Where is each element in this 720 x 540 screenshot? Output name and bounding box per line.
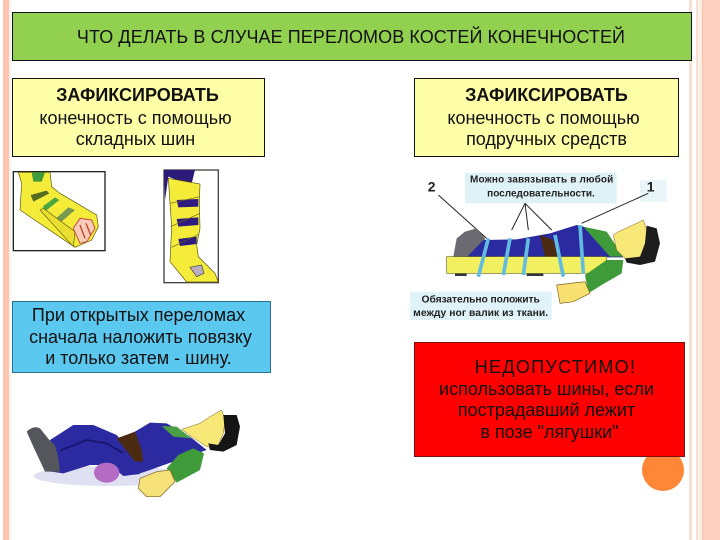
callout: not allowed: в позе "лягушки" bbox=[480, 422, 619, 442]
illustration: immobilising with improvised means: последовательности. bbox=[487, 189, 595, 200]
torso bbox=[133, 423, 207, 473]
panel: fix with folding splints: ЗАФИКСИРОВАТЬ bbox=[56, 85, 219, 105]
hand bbox=[138, 470, 175, 497]
belt bbox=[117, 432, 143, 462]
callout: open fractures note: и только затем - шину. bbox=[45, 348, 232, 368]
callout: open fractures note bbox=[12, 301, 271, 373]
callout: not allowed: использовать шины, если bbox=[439, 379, 654, 399]
callout: not allowed: пострадавший лежит bbox=[458, 400, 635, 420]
title bbox=[12, 12, 692, 61]
caption: roller between legs bbox=[410, 292, 552, 320]
panel: fix with folding splints: конечность с помощью bbox=[39, 108, 232, 128]
collar and sleeve bbox=[162, 426, 192, 438]
illustration: immobilising with improvised means bbox=[410, 172, 666, 320]
caption: any order bbox=[465, 173, 617, 203]
roll of fabric bbox=[94, 463, 119, 483]
panel: fix with folding splints: складных шин bbox=[76, 129, 195, 149]
pointers bbox=[438, 193, 648, 238]
hand bbox=[557, 282, 590, 303]
body bbox=[467, 225, 623, 257]
illustration: splinted foot, side view bbox=[12, 171, 106, 252]
panel: fix with improvised means: подручных средств bbox=[466, 129, 627, 149]
panel: fix with improvised means: конечность с помощью bbox=[447, 108, 640, 128]
panel: fix with improvised means: ЗАФИКСИРОВАТЬ bbox=[465, 85, 628, 105]
ties bbox=[478, 225, 583, 277]
splint board bbox=[447, 257, 607, 273]
callout: not allowed bbox=[414, 342, 685, 457]
sleeve bbox=[585, 260, 623, 293]
head bbox=[182, 410, 225, 448]
head bbox=[613, 220, 647, 262]
boot bbox=[27, 427, 60, 472]
panel: fix with folding splints bbox=[12, 78, 265, 157]
feet bbox=[453, 228, 485, 257]
panel: fix with improvised means bbox=[414, 78, 679, 157]
illustration: splinted leg, front view bbox=[163, 169, 219, 284]
illustration: injured person lying bbox=[26, 410, 240, 497]
illustration: immobilising with improvised means: Можно завязывать в любой bbox=[470, 174, 613, 186]
illustration: immobilising with improvised means: между ног валик из ткани. bbox=[413, 308, 548, 319]
illustration: immobilising with improvised means: Обязательно положить bbox=[422, 294, 540, 306]
callout: open fractures note: При открытых переломах bbox=[32, 305, 245, 325]
numbers: 2 bbox=[428, 178, 436, 194]
trousers bbox=[47, 425, 140, 476]
title: ЧТО ДЕЛАТЬ В СЛУЧАЕ ПЕРЕЛОМОВ КОСТЕЙ КОНЕЧНОСТЕЙ bbox=[77, 27, 625, 47]
illustration: immobilising with improvised means: 1 bbox=[647, 178, 655, 194]
callout: not allowed: НЕДОПУСТИМО! bbox=[475, 357, 636, 377]
callout: open fractures note: сначала наложить повязку bbox=[29, 326, 252, 346]
decorative orange circle bbox=[642, 449, 684, 491]
